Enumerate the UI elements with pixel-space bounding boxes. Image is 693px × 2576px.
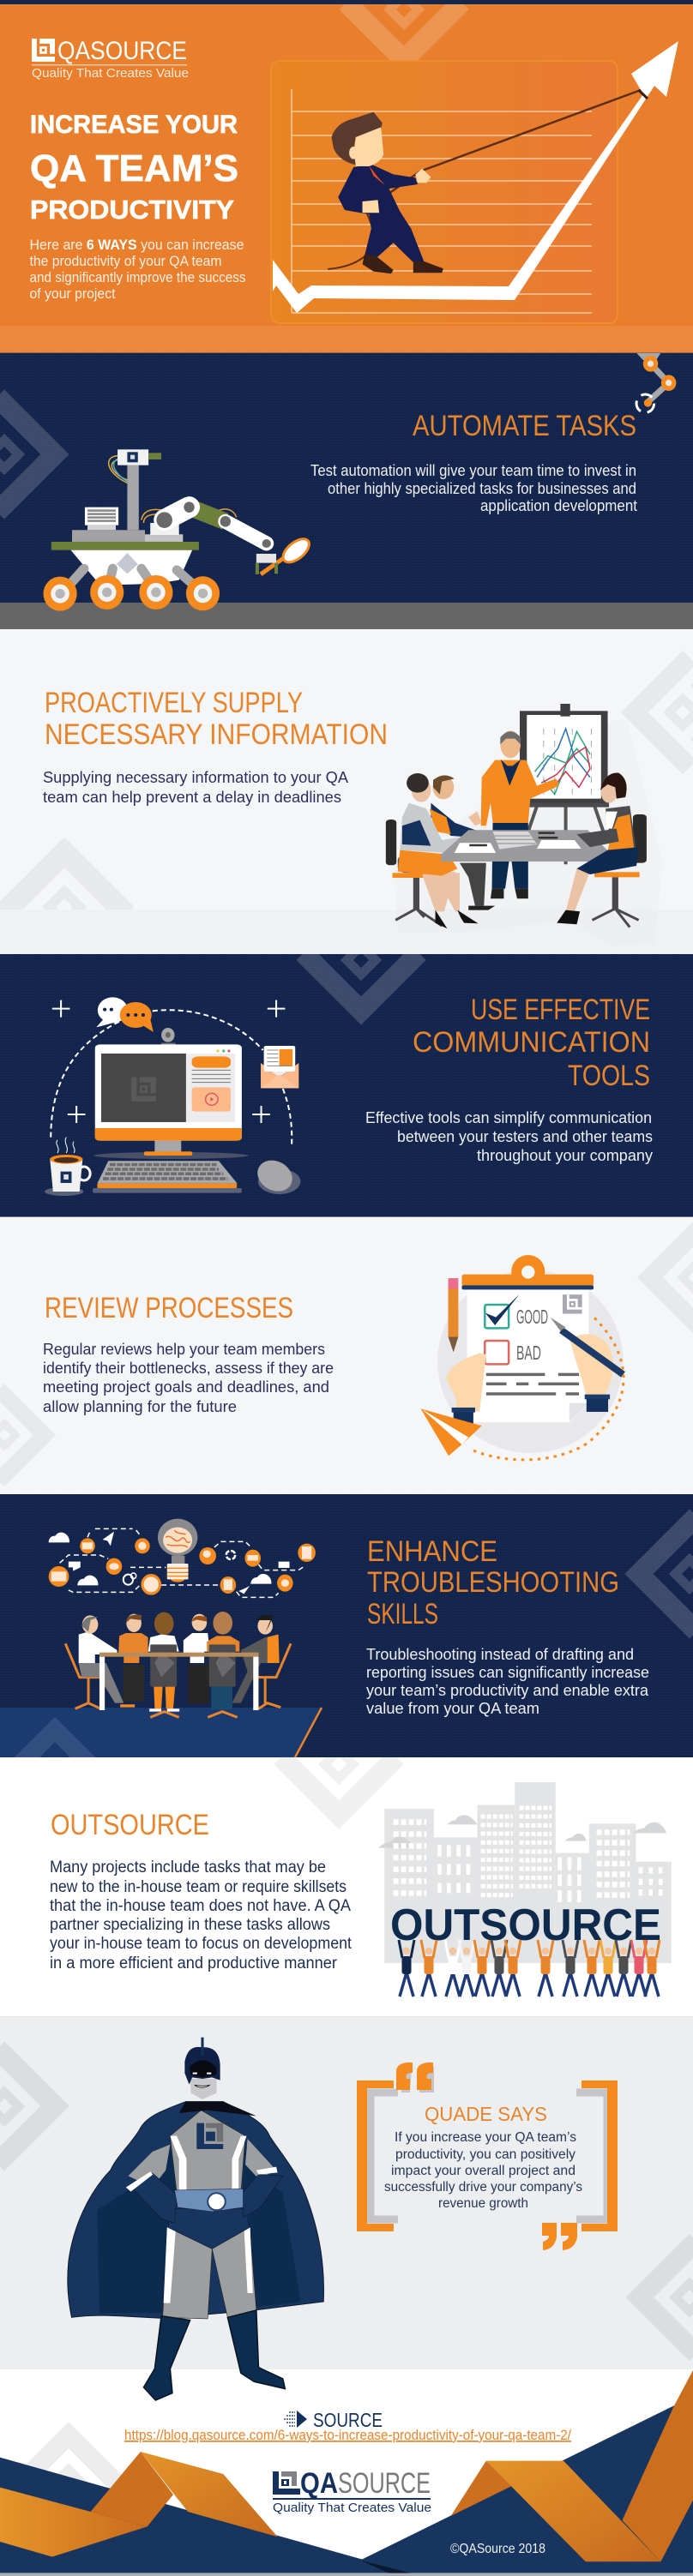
- body text: [310, 462, 637, 514]
- heading: TROUBLESHOOTING: [367, 1566, 619, 1599]
- copyright: ©QASource 2018: [450, 2542, 545, 2556]
- seated man: [430, 775, 495, 910]
- body text: [50, 1858, 353, 1973]
- source label: [284, 2409, 383, 2431]
- heading: ENHANCE: [367, 1535, 497, 1568]
- title: INCREASE YOUR: [30, 111, 238, 139]
- heading: [413, 999, 649, 1085]
- table with papers: [441, 830, 610, 862]
- body text: Effective tools can simplify communication: [365, 1109, 652, 1126]
- illustration: review clipboard: [421, 1255, 624, 1460]
- heading: [367, 1540, 618, 1624]
- heading: NECESSARY INFORMATION: [45, 718, 388, 751]
- body text: Regular reviews help your team members: [43, 1341, 325, 1358]
- footer ribbons: [0, 2370, 693, 2573]
- heading: OUTSOURCE: [51, 1809, 209, 1841]
- floor: [0, 1707, 322, 1757]
- body text: team can help prevent a delay in deadlines: [43, 789, 341, 806]
- seated woman left: [386, 773, 479, 928]
- body text: other highly specialized tasks for businesses and: [328, 480, 636, 497]
- icon: source arrow: [284, 2411, 307, 2428]
- callout text: If you increase your QA team’s: [395, 2130, 576, 2145]
- body: [126, 2111, 283, 2319]
- body text: Supplying necessary information to your QA: [43, 769, 348, 786]
- presenter: [481, 730, 559, 898]
- checklist labels: BAD: [516, 1342, 541, 1364]
- logo: QASource white: [32, 37, 189, 81]
- body text: between your testers and other teams: [397, 1128, 653, 1145]
- title: [30, 111, 238, 225]
- panel: automate tasks: [0, 353, 693, 629]
- panel: outsource: [0, 1757, 693, 2017]
- panel: header: [0, 0, 693, 353]
- intro text: Here are 6 WAYS you can increase: [29, 237, 244, 253]
- heading: SKILLS: [367, 1598, 438, 1630]
- intro text: [29, 237, 245, 302]
- body text: partner specializing in these tasks allows: [50, 1916, 330, 1934]
- head: [179, 2038, 256, 2116]
- panel: proactively supply information: [0, 629, 693, 976]
- body text: [43, 1341, 334, 1415]
- intro text: the productivity of your QA team: [29, 253, 221, 269]
- source link: https://blog.qasource.com/6-ways-to-increase-productivity-of-your-qa-team-2/: [124, 2427, 571, 2443]
- heading: COMMUNICATION: [413, 1026, 650, 1059]
- heading: REVIEW PROCESSES: [45, 1292, 293, 1324]
- body text: that the in-house team does not have. A QA: [50, 1897, 351, 1915]
- logo: QASource white: Quality That Creates Value: [32, 66, 189, 81]
- body text: identify their bottlenecks, assess if they are: [43, 1360, 334, 1377]
- logo: QASource color: QA: [300, 2467, 338, 2500]
- body text: meeting project goals and deadlines, and: [43, 1378, 329, 1396]
- heading: AUTOMATE TASKS: [413, 410, 636, 442]
- panel: footer: [0, 2369, 693, 2576]
- title: QA TEAM’S: [30, 147, 238, 189]
- callout text: revenue growth: [438, 2196, 528, 2211]
- callout heading: QUADE SAYS: [425, 2103, 547, 2125]
- seated woman right: [557, 773, 647, 928]
- logo: QASource white: QASOURCE: [57, 37, 187, 65]
- icon: rover robot: [43, 449, 315, 611]
- icon: white rising arrow: [273, 41, 678, 313]
- top navy strip: [0, 0, 693, 4]
- icon: ceiling robot arm: [636, 353, 676, 412]
- body text: [43, 769, 348, 806]
- heading: PROACTIVELY SUPPLY: [45, 687, 303, 719]
- body text: value from your QA team: [366, 1700, 539, 1717]
- logo: QASource color: SOURCE: [338, 2467, 431, 2500]
- body text: throughout your company: [477, 1147, 653, 1164]
- body text: [366, 1646, 649, 1717]
- illustration: team at table: [65, 1612, 291, 1717]
- panel: communication tools: [0, 954, 693, 1217]
- icon: businessman pulling rope: [328, 90, 648, 273]
- icon: open quote: [396, 2063, 434, 2093]
- big outsource word: OUTSOURCE: [390, 1900, 661, 1950]
- intro text: of your project: [29, 285, 116, 302]
- body text: Troubleshooting instead of drafting and: [366, 1646, 634, 1663]
- illustration: team meeting with chart: [386, 704, 647, 929]
- heading: USE EFFECTIVE: [471, 994, 650, 1026]
- panel: review processes: [0, 1218, 693, 1494]
- source label: SOURCE: [313, 2409, 383, 2431]
- callout text: successfully drive your company’s: [384, 2180, 582, 2195]
- panel: growth chart illustration: [270, 41, 678, 324]
- title: PRODUCTIVITY: [30, 195, 234, 225]
- body text: [365, 1109, 653, 1164]
- cape: [68, 2102, 323, 2318]
- body text: allow planning for the future: [43, 1398, 237, 1415]
- logo: QASource color: [273, 2467, 431, 2515]
- callout text: impact your overall project and: [391, 2164, 575, 2178]
- illustration: Quade superhero mascot: [68, 2038, 323, 2400]
- logo: QASource color: Quality That Creates Value: [273, 2501, 431, 2515]
- boots: [143, 2310, 285, 2400]
- checklist labels: GOOD: [516, 1306, 548, 1328]
- body text: new to the in-house team or require skillsets: [50, 1878, 346, 1896]
- panel: quade says: [0, 2017, 693, 2369]
- illustration: crowd holding word: [399, 1940, 660, 1997]
- illustration: ideas network: [49, 1519, 316, 1597]
- heading: [46, 692, 386, 744]
- icon: close quote: [542, 2223, 577, 2250]
- people: [79, 1612, 280, 1712]
- body text: your in-house team to focus on development: [50, 1935, 353, 1953]
- body text: your team’s productivity and enable extra: [366, 1682, 649, 1699]
- callout text: productivity, you can positively: [395, 2147, 575, 2162]
- heading: TOOLS: [568, 1060, 650, 1092]
- body text: Test automation will give your team time to invest in: [310, 462, 636, 479]
- callout: bracket frame: [357, 2063, 618, 2250]
- body text: in a more efficient and productive manner: [50, 1955, 338, 1973]
- body text: application development: [480, 497, 637, 514]
- checklist labels: [516, 1310, 547, 1360]
- intro text: and significantly improve the success: [29, 269, 245, 285]
- body text: reporting issues can significantly increase: [366, 1664, 649, 1681]
- illustration: desktop computer with chat: [45, 997, 300, 1196]
- body text: Many projects include tasks that may be: [50, 1858, 326, 1876]
- easel with chart: [520, 704, 609, 864]
- illustration: city skyline: [378, 1782, 672, 1963]
- callout text: [384, 2130, 582, 2211]
- panel: troubleshooting skills: [0, 1494, 693, 1757]
